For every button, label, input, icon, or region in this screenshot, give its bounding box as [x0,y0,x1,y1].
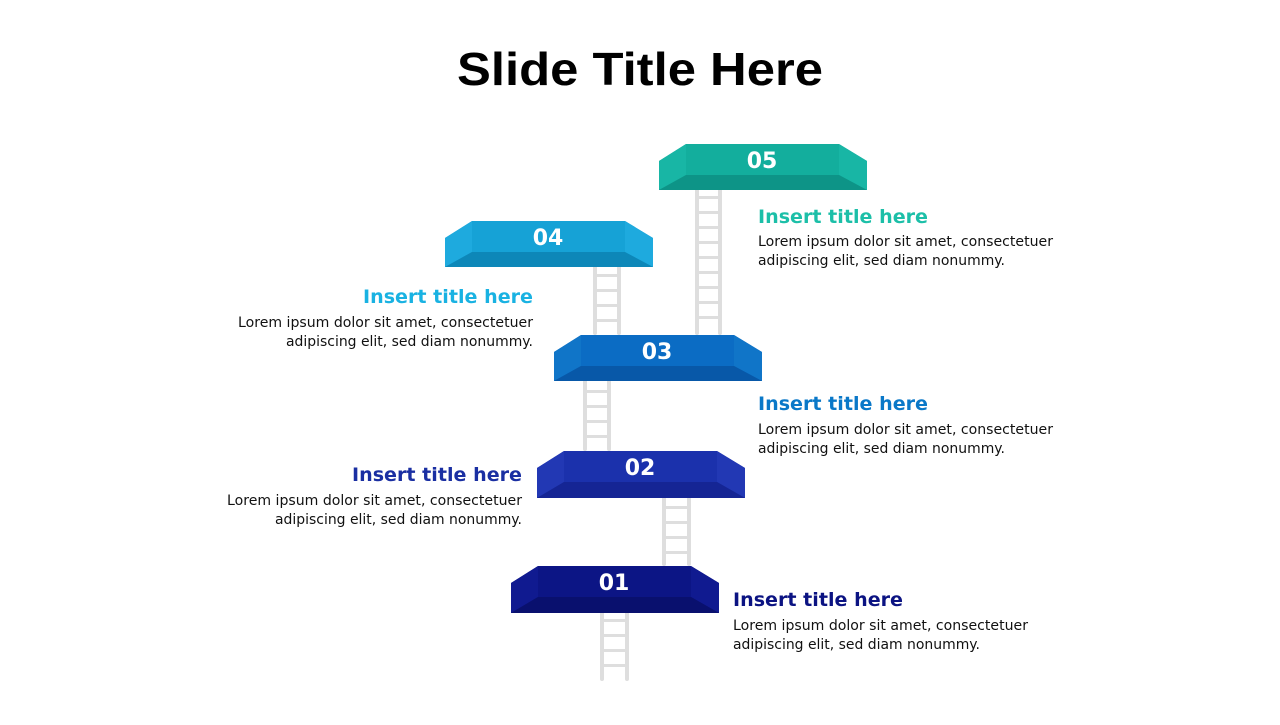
ladder: 05 to 03 [695,181,722,335]
text: step 04: adipiscing elit, sed diam nonummy. [286,334,533,350]
text: step 05: Lorem ipsum dolor sit amet, consectetuer [758,234,1053,250]
platform 01: 01 [599,571,629,596]
text: step 03 [758,393,1053,457]
platform 02 [537,451,745,498]
text: step 05: adipiscing elit, sed diam nonummy. [758,253,1005,269]
ladder: below 01 [600,604,629,681]
text: step 02: Lorem ipsum dolor sit amet, consectetuer [227,493,522,509]
ladder: 03 to 02 [583,375,611,451]
platform 02: 02 [625,456,655,481]
text: step 03: Insert title here [758,393,928,415]
text: step 03: Lorem ipsum dolor sit amet, consectetuer [758,422,1053,438]
text: step 02: adipiscing elit, sed diam nonummy. [275,512,522,528]
platform 01 [511,566,719,613]
text: step 04: Lorem ipsum dolor sit amet, consectetuer [238,315,533,331]
platform 03: 03 [642,340,672,365]
text: step 02 [227,464,522,528]
text: step 01 [733,589,1028,653]
text: step 05: Insert title here [758,206,928,228]
text: step 01: Insert title here [733,589,903,611]
platform 03 [554,335,762,381]
text: step 04 [238,286,533,350]
text: step 02: Insert title here [352,464,522,486]
text: step 01: Lorem ipsum dolor sit amet, consectetuer [733,618,1028,634]
ladder: 02 to 01 [662,491,691,566]
text: step 05 [758,206,1053,269]
title: Slide Title Here [457,43,823,95]
platform 05 [659,144,867,190]
platform 04: 04 [533,226,563,251]
ladder: 04 to 03 [593,259,621,335]
platform 04 [445,221,653,267]
text: step 01: adipiscing elit, sed diam nonummy. [733,637,980,653]
platform 05: 05 [747,149,777,174]
text: step 04: Insert title here [363,286,533,308]
text: step 03: adipiscing elit, sed diam nonummy. [758,441,1005,457]
